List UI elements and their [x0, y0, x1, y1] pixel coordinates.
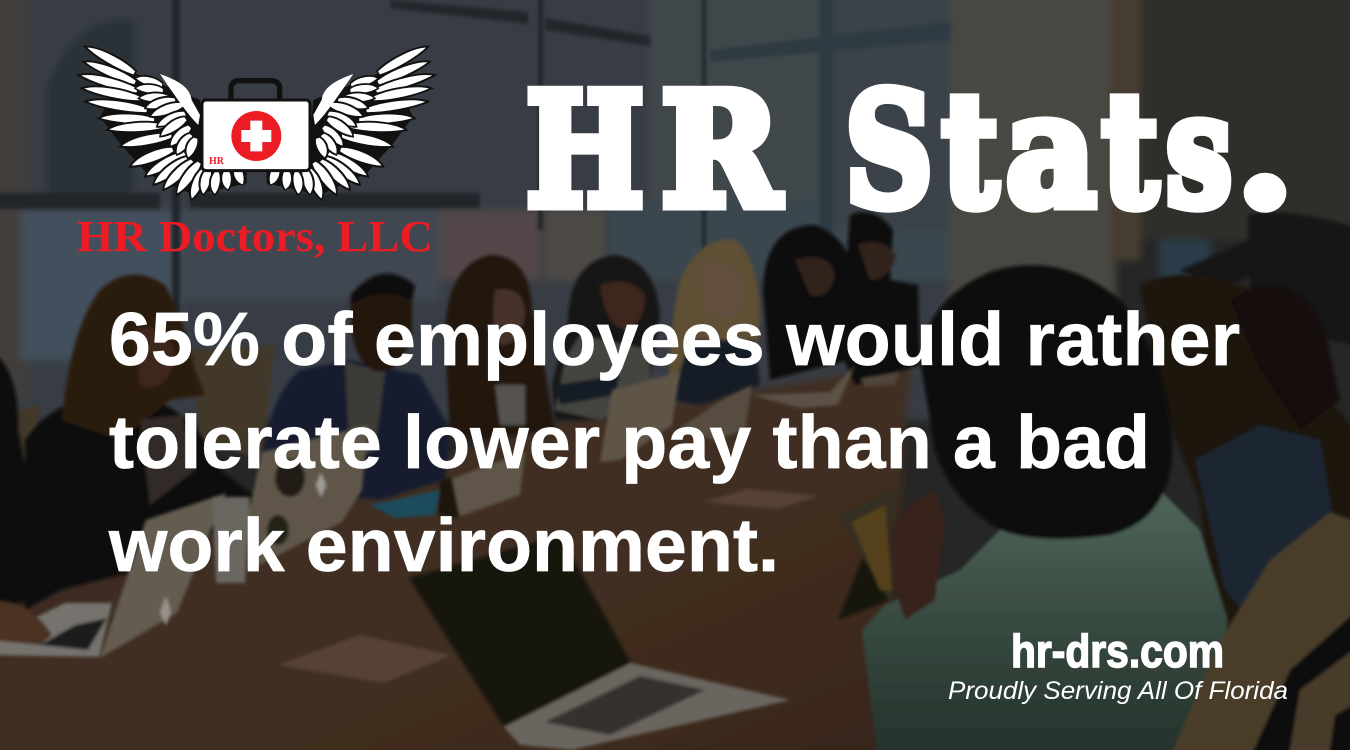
title: t	[942, 59, 998, 242]
title: a	[1006, 59, 1096, 242]
left wing	[77, 41, 248, 202]
main statistic: work environment.	[108, 503, 779, 587]
case handle	[231, 81, 280, 107]
laptops and table items	[0, 365, 900, 750]
tagline: Proudly Serving All Of Florida	[948, 677, 1288, 705]
window frames	[0, 0, 950, 340]
title: .	[1236, 59, 1294, 242]
right wing	[266, 41, 436, 202]
red circle with cross	[231, 111, 281, 161]
main statistic	[108, 297, 1240, 587]
logo wordmark: HR Doctors, LLC	[77, 212, 433, 261]
chairs behind people	[15, 345, 275, 470]
website: hr-drs.com	[1011, 625, 1224, 677]
title: H	[526, 59, 644, 242]
conference table	[0, 365, 910, 750]
case label: HR	[209, 156, 225, 167]
icon: winged medical case	[77, 41, 436, 202]
title: R	[661, 59, 781, 242]
main statistic: tolerate lower pay than a bad	[109, 400, 1150, 484]
title: s	[1166, 59, 1232, 242]
title: t	[1102, 59, 1158, 242]
logo: HR Doctors	[77, 41, 436, 261]
seated colleagues	[0, 212, 1350, 610]
foreground woman with teal jacket	[862, 265, 1228, 750]
title: S	[845, 59, 933, 242]
main statistic: 65% of employees would rather	[109, 297, 1240, 381]
chairs in foreground	[1160, 512, 1350, 750]
tablet on table	[837, 488, 899, 620]
case body	[202, 100, 310, 171]
person in denim jacket	[1140, 275, 1350, 750]
